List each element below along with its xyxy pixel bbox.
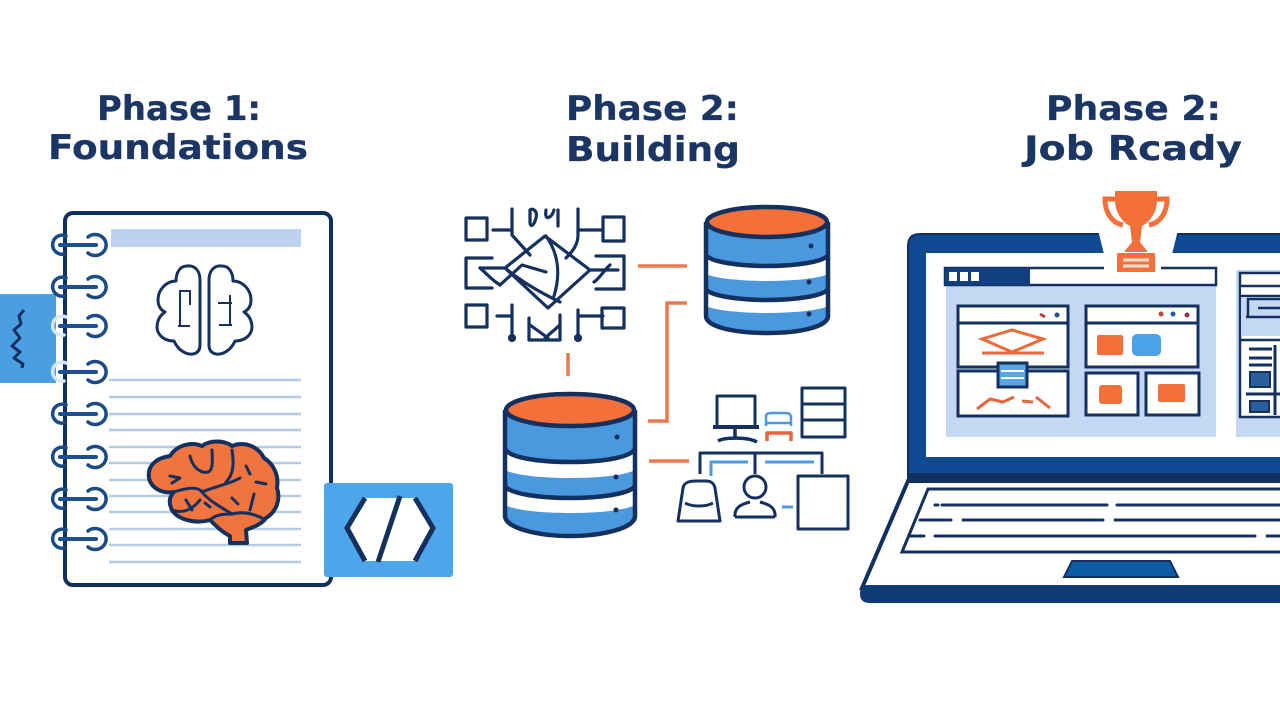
icon: database bottom left [505,394,635,536]
arrows: orange connectors [568,266,689,461]
heading: job ready: Job Rcady [1022,129,1242,169]
icon: network of computer and users [678,388,848,529]
heading: phase 1: Foundations [48,128,308,168]
icon: database top right [706,207,828,333]
heading: phase 1: Phase 1: [97,89,261,129]
heading: job ready: Phase 2: [1046,89,1221,129]
laptop bezel bottom shadow [907,473,1280,481]
icon: code tag box [324,483,453,577]
card: bottom tile right [1146,373,1199,415]
trackpad [1064,561,1178,577]
laptop front edge [860,585,1280,603]
heading: phase 1 [48,89,308,168]
icon: orange brain [149,442,278,543]
small central tile [998,363,1027,387]
heading: phase 2 building: Building [566,130,740,170]
dashboard window left [945,266,1216,437]
notebook spiral rings [53,234,106,550]
icon: line brain with circuits [157,266,252,354]
icon: circuit diagram [466,209,624,340]
notebook page [65,213,331,585]
heading: phase 2 building: Phase 2: [566,89,739,129]
panel: phase 2 building [466,89,848,536]
notebook text lines [109,380,301,562]
window title bar [945,266,1216,285]
dashboard window right [1236,270,1280,437]
panel: phase 2 job ready [860,89,1280,603]
heading: job ready [1022,89,1242,169]
card: bottom tile left [1086,373,1138,415]
card: chart left bottom [958,371,1068,416]
panel: phase 1 foundations [0,89,453,585]
card: chart left top [958,306,1068,367]
icon: blue side tab [0,294,56,383]
laptop keyboard deck [862,481,1280,588]
laptop screen [926,253,1280,457]
icon: trophy [1105,191,1167,272]
keyboard [902,489,1280,552]
heading: phase 2 building [566,89,740,170]
notebook title bar [111,229,301,247]
trophy gap [1098,230,1178,254]
card: right top with tiles [1086,306,1198,367]
laptop screen bezel [908,234,1280,480]
